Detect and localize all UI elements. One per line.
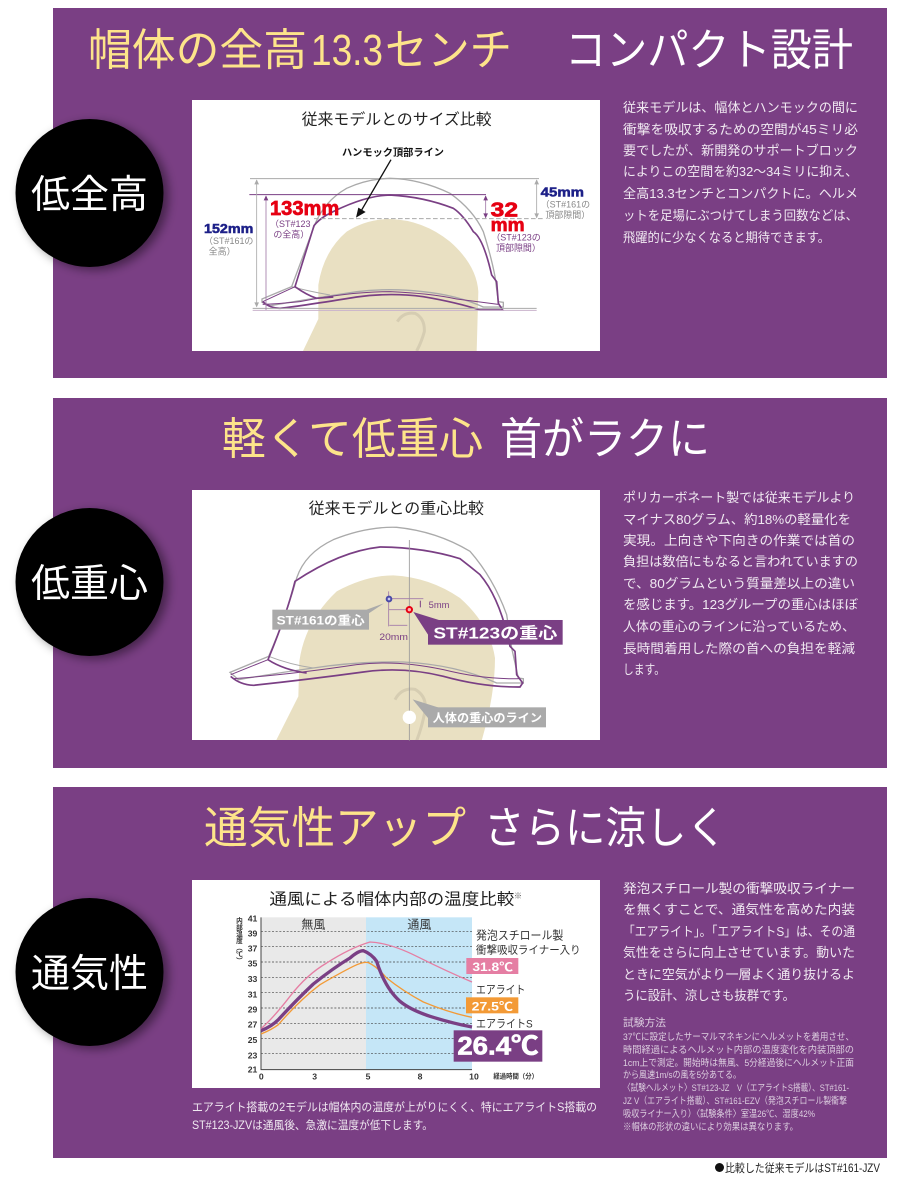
description text: low height: 飛躍的に少なくなると期待できます。 — [623, 230, 830, 245]
test method notes: 吸収ライナー入り）〈試験条件〉室温26℃、湿度42% — [623, 1108, 815, 1120]
label: 133mm: （ST#123 — [270, 219, 310, 229]
diagram: center of gravity comparison — [192, 490, 600, 741]
heading: lighter: 首がラクに — [500, 415, 710, 464]
y axis labels: 27 — [248, 1020, 258, 1030]
label: ST#123 center: ST#123の重心 — [433, 625, 558, 643]
y axis labels: 33 — [248, 974, 258, 984]
y axis labels: 39 — [248, 928, 258, 938]
test method notes: 試験方法 — [623, 1016, 667, 1029]
badge: low height — [16, 119, 164, 267]
x axis labels: 3 — [312, 1071, 317, 1081]
panel: ventilation — [53, 787, 887, 1158]
center of gravity markers: 5mm — [429, 600, 450, 610]
label: 133mm: 133mm — [270, 198, 339, 220]
helmet outlines — [262, 178, 503, 310]
label: 152mm: 152mm — [204, 221, 253, 236]
label: 32mm: mm — [491, 214, 525, 235]
measurement lines — [249, 179, 543, 310]
x axis title: 経過時間（分） — [493, 1072, 538, 1081]
description text: center of gravity: を感じます。123グループの重心はほぼ — [623, 597, 858, 612]
heading: compact design: 帽体の全高 — [88, 26, 307, 75]
x axis labels: 5 — [366, 1071, 371, 1081]
x axis labels: 8 — [418, 1071, 423, 1081]
test method notes: 時間経過によるヘルメット内部の温度変化を内装頂部の — [623, 1044, 854, 1056]
helmet outlines — [230, 527, 523, 687]
test method notes: 37℃に設定したサーマルマネキンにヘルメットを着用させ、 — [623, 1031, 854, 1043]
label: hammock top line with arrow: ハンモック頂部ライン — [342, 146, 444, 159]
panel: low height — [53, 8, 887, 378]
head silhouette — [276, 575, 495, 741]
plot background: 無風 — [301, 918, 326, 932]
footnote: 比較した従来モデルはST#161-JZV — [725, 1161, 880, 1175]
line: foam liner — [261, 942, 472, 1029]
test method notes: 〈試験ヘルメット〉ST#123-JZ V（エアライトS搭載）、ST#161- — [623, 1082, 849, 1094]
label: 32mm: 32 — [491, 199, 518, 221]
heading: lighter — [222, 415, 710, 464]
description text: low height: 要でしたが、新開発のサポートブロック — [623, 143, 858, 158]
description text: center of gravity: マイナス80グラム、約18%の軽量化を — [623, 512, 851, 527]
y axis labels: 37 — [248, 943, 258, 953]
diagram: size comparison — [192, 100, 600, 352]
label: 133mm — [270, 198, 339, 240]
heading: compact design — [88, 26, 853, 75]
label: 32mm: （ST#123の — [491, 233, 541, 243]
label: ST#161 center — [272, 603, 384, 630]
description text: low height: 衝撃を吸収するための空間が45ミリ必 — [623, 122, 858, 137]
test method notes: 1cm上で測定。開始時は無風、5分経過後にヘルメット正面 — [623, 1057, 854, 1069]
label: airlite: 27.5℃ — [472, 999, 513, 1013]
heading: ventilation: さらに涼しく — [484, 804, 727, 853]
y axis labels: 31 — [248, 989, 258, 999]
plot background — [261, 917, 472, 1070]
axes — [261, 917, 472, 1070]
description text: ventilation: を無くすことで、通気性を高めた内装 — [623, 902, 855, 917]
heading: compact design: 13.3 — [311, 26, 383, 75]
description text: center of gravity: 人体の重心のラインに沿っているため、 — [623, 619, 855, 634]
ear — [397, 313, 424, 351]
label: 32mm: 頂部隙間） — [496, 242, 541, 253]
y axis labels: 21 — [248, 1064, 258, 1074]
center of gravity markers — [379, 591, 450, 642]
y axis labels: 41 — [248, 913, 258, 923]
y axis labels — [248, 913, 258, 1074]
x axis labels: 0 — [259, 1071, 264, 1081]
description text: center of gravity: 負担は数倍にもなると言われていますの — [623, 554, 858, 569]
description text: center of gravity: ポリカーボネート製では従来モデルより — [623, 490, 855, 505]
chart caption: ST#123-JZVは通風後、急激に温度が低下します。 — [192, 1118, 433, 1132]
description text: ventilation: ときに空気がより一層よく通り抜けるよ — [623, 967, 855, 982]
label: 45mm: 45mm — [541, 185, 584, 200]
center of gravity markers: 20mm — [379, 632, 408, 642]
y axis labels: 23 — [248, 1050, 258, 1060]
label: 32mm — [491, 199, 541, 253]
label: ST#123 center — [413, 612, 563, 645]
description text: low height — [623, 100, 858, 245]
description text: center of gravity: で、80グラムという質量差以上の違い — [623, 576, 855, 591]
plot background: 通風 — [407, 919, 432, 932]
description text: ventilation — [623, 881, 855, 1003]
label: airlite S: 26.4℃ — [457, 1033, 539, 1061]
description text: low height: ットを足場にぶつけてしまう回数などは、 — [623, 208, 858, 223]
label: human center line: 人体の重心のライン — [433, 711, 542, 725]
badge: low center of gravity — [16, 508, 164, 656]
heading: compact design: センチ — [385, 26, 512, 75]
label: ST#161 center: ST#161の重心 — [277, 613, 365, 627]
label: hammock top line with arrow — [342, 146, 444, 218]
chart caption: エアライト搭載の2モデルは帽体内の温度が上がりにくく、特にエアライトS搭載の — [192, 1100, 597, 1114]
description text: center of gravity — [623, 490, 858, 677]
description text: ventilation: 気性をさらに向上させています。動いた — [623, 945, 855, 960]
label: 152mm — [204, 221, 253, 257]
label: foam liner: 発泡スチロール製 — [476, 928, 564, 942]
label: airlite: エアライト — [476, 985, 525, 997]
badge: low height: 低全高 — [31, 174, 148, 217]
description text: ventilation: 「エアライト」。「エアライトS」は、その通 — [623, 924, 855, 939]
description text: center of gravity: します。 — [623, 662, 665, 677]
label: 45mm: 頂部隙間） — [545, 209, 590, 220]
badge: low center of gravity: 低重心 — [31, 563, 148, 606]
x axis labels — [259, 1071, 479, 1081]
description text: ventilation: 発泡スチロール製の衝撃吸収ライナー — [623, 881, 855, 896]
chart title: 従来モデルとのサイズ比較 — [302, 110, 492, 128]
label: 152mm: （ST#161の — [204, 236, 253, 246]
heading: compact design: コンパクト設計 — [565, 26, 853, 75]
gridlines — [261, 932, 472, 1054]
chart title: 通風による帽体内部の温度比較 — [269, 890, 514, 908]
head silhouette — [303, 219, 478, 352]
line: airlite — [261, 962, 472, 1034]
label: airlite S — [454, 1019, 542, 1062]
panel: low center of gravity — [53, 398, 887, 768]
description text: center of gravity: 長時間着用した際の首への負担を軽減 — [623, 641, 855, 656]
ear — [395, 689, 425, 741]
label: foam liner — [466, 928, 581, 974]
label: human center line — [403, 699, 546, 727]
test method notes: ※帽体の形状の違いにより効果は異なります。 — [623, 1121, 798, 1133]
y axis labels: 29 — [248, 1005, 258, 1015]
test method notes — [623, 1016, 854, 1133]
description text: low height: 従来モデルは、幅体とハンモックの間に — [623, 100, 858, 115]
description text: center of gravity: 実現。上向きや下向きの作業では首の — [623, 533, 855, 548]
chart title: 従来モデルとの重心比較 — [309, 499, 484, 517]
label: foam liner: 31.8℃ — [472, 960, 513, 974]
chart caption — [192, 1100, 597, 1132]
x axis labels: 10 — [469, 1071, 479, 1081]
description text: ventilation: うに設計、涼しさも抜群です。 — [623, 988, 795, 1003]
chart: temperature comparison — [192, 880, 600, 1088]
line: airlite S — [261, 951, 472, 1031]
y axis labels: 25 — [248, 1035, 258, 1045]
y axis title: 内部温度（℃） — [234, 916, 243, 964]
label: 45mm: （ST#161の — [541, 200, 590, 210]
heading: ventilation — [204, 804, 727, 853]
test method notes: JZ V（エアライト搭載）、ST#161-EZV（発泡スチロール製衝撃 — [623, 1095, 847, 1107]
chart: temperature comparison: ※ — [514, 892, 522, 901]
label: 152mm: 全高） — [209, 246, 236, 257]
vertical center line — [408, 540, 411, 741]
heading: lighter: 軽くて低重心 — [222, 415, 483, 464]
badge: ventilation: 通気性 — [31, 953, 148, 996]
label: 133mm: の全高） — [273, 229, 309, 240]
label: airlite S: エアライトS — [476, 1019, 533, 1031]
y axis labels: 35 — [248, 959, 258, 969]
description text: low height: によりこの空間を約32～34ミリに抑え、 — [623, 164, 858, 179]
heading: ventilation: 通気性アップ — [204, 804, 466, 853]
label: 45mm — [541, 185, 590, 220]
badge: ventilation — [16, 898, 164, 1046]
label: airlite — [466, 985, 525, 1013]
test method notes: から風速1m/sの風を5分あてる。 — [623, 1070, 741, 1081]
description text: low height: 全高13.3センチとコンパクトに。ヘルメ — [623, 186, 858, 201]
label: foam liner: 衝撃吸収ライナー入り — [476, 942, 581, 956]
